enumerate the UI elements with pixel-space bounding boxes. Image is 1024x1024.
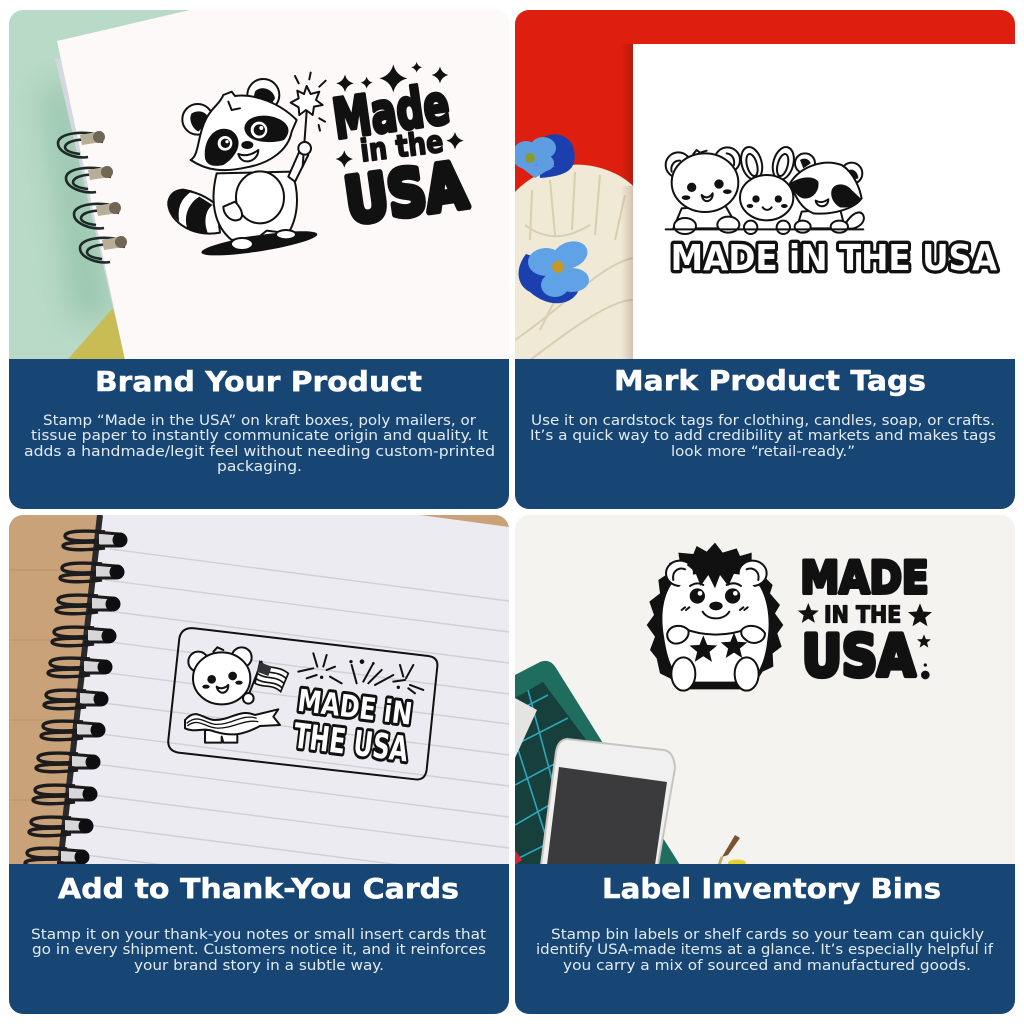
body text: brand your product: Stamp “Made in the USA” on kraft boxes, poly mailers, or (43, 413, 476, 429)
stamp: bear with flag and Made in the USA (168, 628, 437, 779)
panel: brand your product (9, 10, 509, 509)
stamp: raccoon with sparkler and Made in the USA (168, 62, 471, 260)
body text: add to thank-you cards: your brand story in a subtle way. (134, 958, 384, 974)
photo: white card on red with knit and flowers (512, 10, 1015, 360)
stamp: three animals with Made in the USA (666, 145, 998, 279)
body text: mark product tags: look more “retail-ready.” (671, 444, 855, 460)
body text: brand your product: adds a handmade/legit feel without needing custom-printed (24, 444, 495, 460)
stamp text: MADE IN THE USA: MADE (800, 552, 929, 604)
icon: bear (666, 147, 740, 234)
body text: label inventory bins: you carry a mix of sourced and manufactured goods. (563, 958, 971, 974)
body text: brand your product (24, 413, 495, 475)
icon: raccoon (168, 73, 326, 260)
body text: brand your product: tissue paper to instantly communicate origin and quality. It (31, 428, 488, 444)
caption bar: label inventory bins (515, 864, 1015, 1014)
icon: hedgehog (647, 543, 783, 691)
fireworks (298, 653, 423, 693)
photo: notebook on green background (9, 10, 509, 360)
stars (336, 62, 464, 168)
caption bar: brand your product (9, 359, 509, 509)
stamp border (168, 628, 437, 779)
body text: label inventory bins: identify USA-made items at a glance. It’s especially helpful if (536, 942, 994, 958)
caption bar: add to thank-you cards (9, 864, 509, 1014)
heading: Brand Your Product: Brand Your Product (95, 365, 422, 398)
body text: label inventory bins (536, 927, 994, 974)
heading: Mark Product Tags: Mark Product Tags (614, 364, 926, 397)
heading: Label Inventory Bins: Label Inventory Bins (602, 872, 941, 905)
stamp text: Made in the USA: Made (329, 72, 453, 152)
stamp text: Made in the USA: in the (358, 125, 445, 170)
caption bar: mark product tags (515, 359, 1015, 509)
icon: raccoon (790, 153, 864, 233)
icon: rabbit (738, 145, 797, 234)
stamp text: Made in the USA: USA (340, 148, 471, 238)
heading: Add to Thank-You Cards: Add to Thank-You Cards (58, 872, 459, 905)
body text: add to thank-you cards (31, 927, 486, 974)
stamp text: MADE IN THE USA: USA (802, 624, 915, 690)
stamp text: MADE iN THE USA: THE USA (291, 717, 410, 770)
panel: add to thank-you cards (9, 515, 509, 1014)
panel: mark product tags (512, 10, 1015, 509)
photo: spiral notebook on wood (9, 515, 509, 864)
icon: bear with flag and ribbon (185, 647, 288, 743)
body text: mark product tags (530, 413, 996, 460)
panel: label inventory bins (515, 515, 1015, 1014)
stamp text: MADE IN THE USA: IN THE (824, 601, 901, 629)
body text: add to thank-you cards: Stamp it on your thank-you notes or small insert cards that (31, 927, 486, 943)
body text: label inventory bins: Stamp bin labels or shelf cards so your team can quickly (551, 927, 984, 943)
stamp text: MADE IN THE USA (798, 558, 932, 680)
body text: add to thank-you cards: go in every shipment. Customers notice it, and it reinforces (32, 942, 486, 958)
body text: mark product tags: It’s a quick way to add credibility at markets and makes tags (530, 428, 996, 444)
body text: brand your product: packaging. (217, 459, 302, 475)
stamp text: Made in the USA (332, 83, 472, 225)
stamp text: MADE iN THE USA: MADE iN THE USA (671, 238, 998, 279)
body text: mark product tags: Use it on cardstock tags for clothing, candles, soap, or crafts. (531, 413, 995, 429)
stamp: hedgehog with Made in the USA (647, 543, 932, 691)
ground line (664, 228, 864, 230)
stamp text: MADE iN THE USA (291, 684, 414, 770)
stamp text: MADE iN THE USA: MADE iN (296, 684, 414, 733)
photo: desk with cutting mat and phone (515, 515, 1015, 866)
